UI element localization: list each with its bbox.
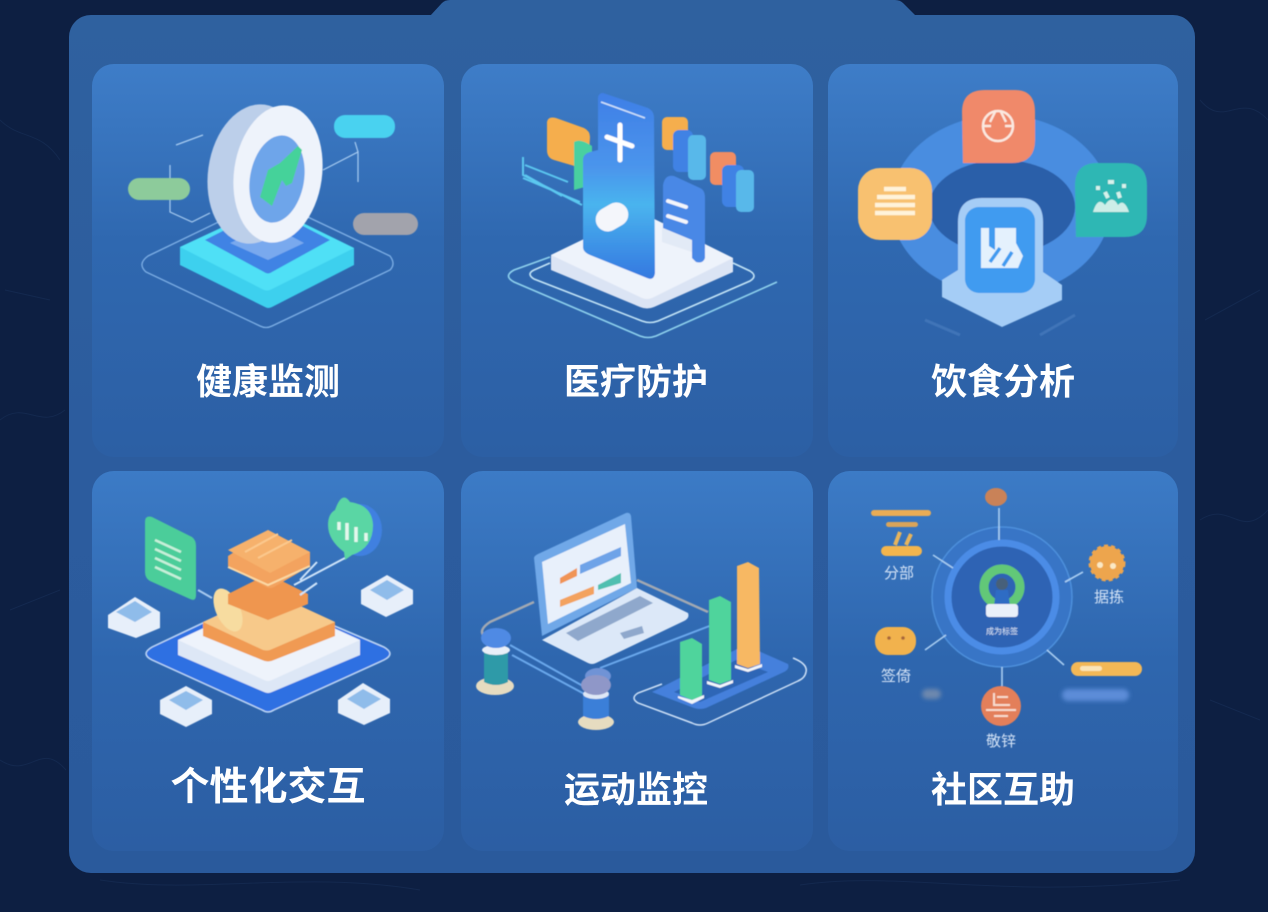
panel: 饮食分析: [828, 64, 1178, 457]
top tab of main panel: [430, 0, 916, 16]
heading: 个性化交互: [170, 766, 366, 809]
icon: top-left item: [871, 510, 931, 556]
heading: 饮食分析: [931, 361, 1075, 402]
illustration: medical phone: [508, 93, 777, 338]
heading: 健康监测: [196, 361, 340, 402]
icon: yellow tile: [858, 168, 932, 240]
illustration: community hub: [871, 488, 1142, 750]
panel: 医疗防护: [461, 64, 813, 457]
icon: green document: [145, 517, 196, 600]
icon: yellow face: [875, 627, 916, 655]
illustration: health monitor ring: [128, 98, 418, 327]
illustration: community hub: 签倚: [881, 668, 911, 685]
bar chart: [634, 562, 806, 725]
illustration: community hub: 成为标签: [986, 626, 1018, 636]
panel: 社区互助: [828, 471, 1178, 851]
heading: 医疗防护: [564, 361, 708, 402]
icon: chat bubble: [328, 498, 382, 560]
laptop: [534, 513, 688, 664]
icon: four small cubes: [108, 575, 413, 727]
heading: 运动监控: [564, 769, 708, 810]
panel: 个性化交互: [92, 471, 444, 851]
illustration: community hub: 分部: [884, 565, 914, 582]
heading: 社区互助: [931, 769, 1075, 810]
icon: teal tile: [1075, 163, 1147, 237]
icon: orange flower: [1090, 546, 1124, 580]
icon: blue center tile on pedestal: [942, 198, 1062, 327]
panel: 健康监测: [92, 64, 444, 457]
icon: orange circle: [981, 686, 1021, 726]
panel: 运动监控: [461, 471, 813, 851]
cylinder sensors: [476, 628, 614, 730]
illustration: layered stack: [108, 498, 413, 727]
illustration: laptop and bars: [476, 513, 806, 730]
illustration: community hub: 敬锌: [986, 733, 1016, 750]
icon: orange tile: [962, 90, 1035, 163]
illustration: community hub: 据拣: [1094, 589, 1124, 606]
illustration: diet ring with tiles: [858, 90, 1147, 335]
